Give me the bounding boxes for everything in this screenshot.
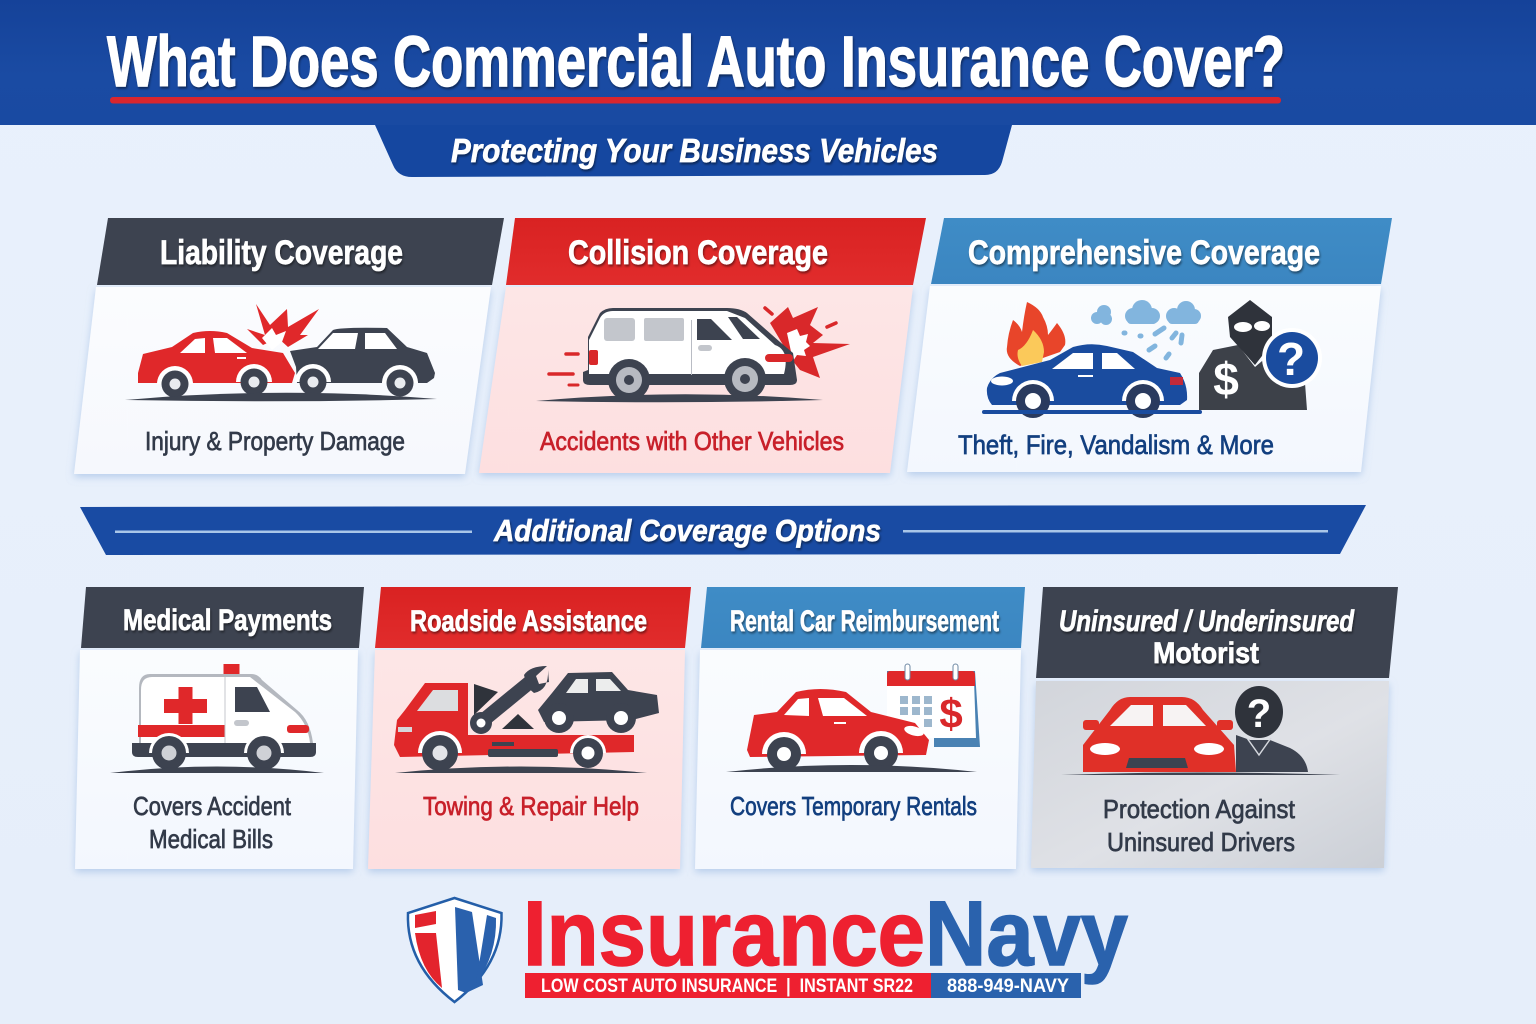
header band [0,0,1536,125]
icon: red car and unknown driver [1061,686,1340,775]
caption: comprehensive: Theft, Fire, Vandalism & More [958,430,1274,460]
heading: liability: Liability Coverage [160,234,403,272]
subtitle ribbon [375,125,1012,177]
heading: uninsured line 1: Uninsured / Underinsured [1059,605,1355,638]
icon: two cars colliding [125,304,437,401]
panel: medical payments [75,587,364,869]
heading: medical payments: Medical Payments [123,604,332,637]
panel: roadside assistance [368,587,691,869]
icon: red car and unknown driver: ? [1247,692,1271,736]
icon: van crash [536,307,850,402]
phone number: 888-949-NAVY [947,976,1069,997]
icon: fire, storm, thief over blue car: $ [1213,353,1239,405]
heading: comprehensive: Comprehensive Coverage [968,234,1320,272]
heading: uninsured line 2: Motorist [1153,637,1259,670]
section banner: additional coverage options [80,505,1366,555]
panel: uninsured / underinsured motorist [1031,587,1398,868]
caption: roadside: Towing & Repair Help [423,791,639,821]
panel: rental car reimbursement [695,587,1025,869]
icon: fire, storm, thief over blue car: ? [1277,333,1305,385]
panel: comprehensive coverage [907,218,1392,472]
caption: medical payments: Covers Accident [133,791,292,821]
caption: liability: Injury & Property Damage [145,426,405,456]
caption: rental: Covers Temporary Rentals [730,791,977,821]
panel: liability coverage [74,218,504,474]
logo wordmark blue: Navy [925,883,1128,985]
heading: rental: Rental Car Reimbursement [730,605,999,638]
logo wordmark red: Insurance [523,883,925,985]
caption: uninsured line 1: Protection Against [1103,794,1296,824]
caption: collision: Accidents with Other Vehicles [540,426,844,456]
icon: tow truck with wrench and car [394,666,659,773]
banner text: Additional Coverage Options [493,513,881,548]
title underline [110,97,1281,104]
icon: red car and calendar [726,664,980,772]
tagline text: LOW COST AUTO INSURANCE | INSTANT SR22 [541,976,913,997]
icon: ambulance [110,664,324,773]
heading: collision: Collision Coverage [568,234,828,272]
caption: uninsured line 2: Uninsured Drivers [1107,827,1295,857]
icon: shield [408,898,502,1002]
logo: InsuranceNavy [408,883,1128,1002]
tagline bar red [525,973,931,998]
subtitle text: Protecting Your Business Vehicles [451,132,938,169]
heading: roadside: Roadside Assistance [410,605,647,638]
panel: collision coverage [479,218,926,473]
caption line 2: Medical Bills [149,824,273,854]
tagline bar blue [931,973,1081,998]
icon: red car and calendar: $ [939,690,963,737]
icon: fire, storm, thief over blue car [982,300,1322,418]
